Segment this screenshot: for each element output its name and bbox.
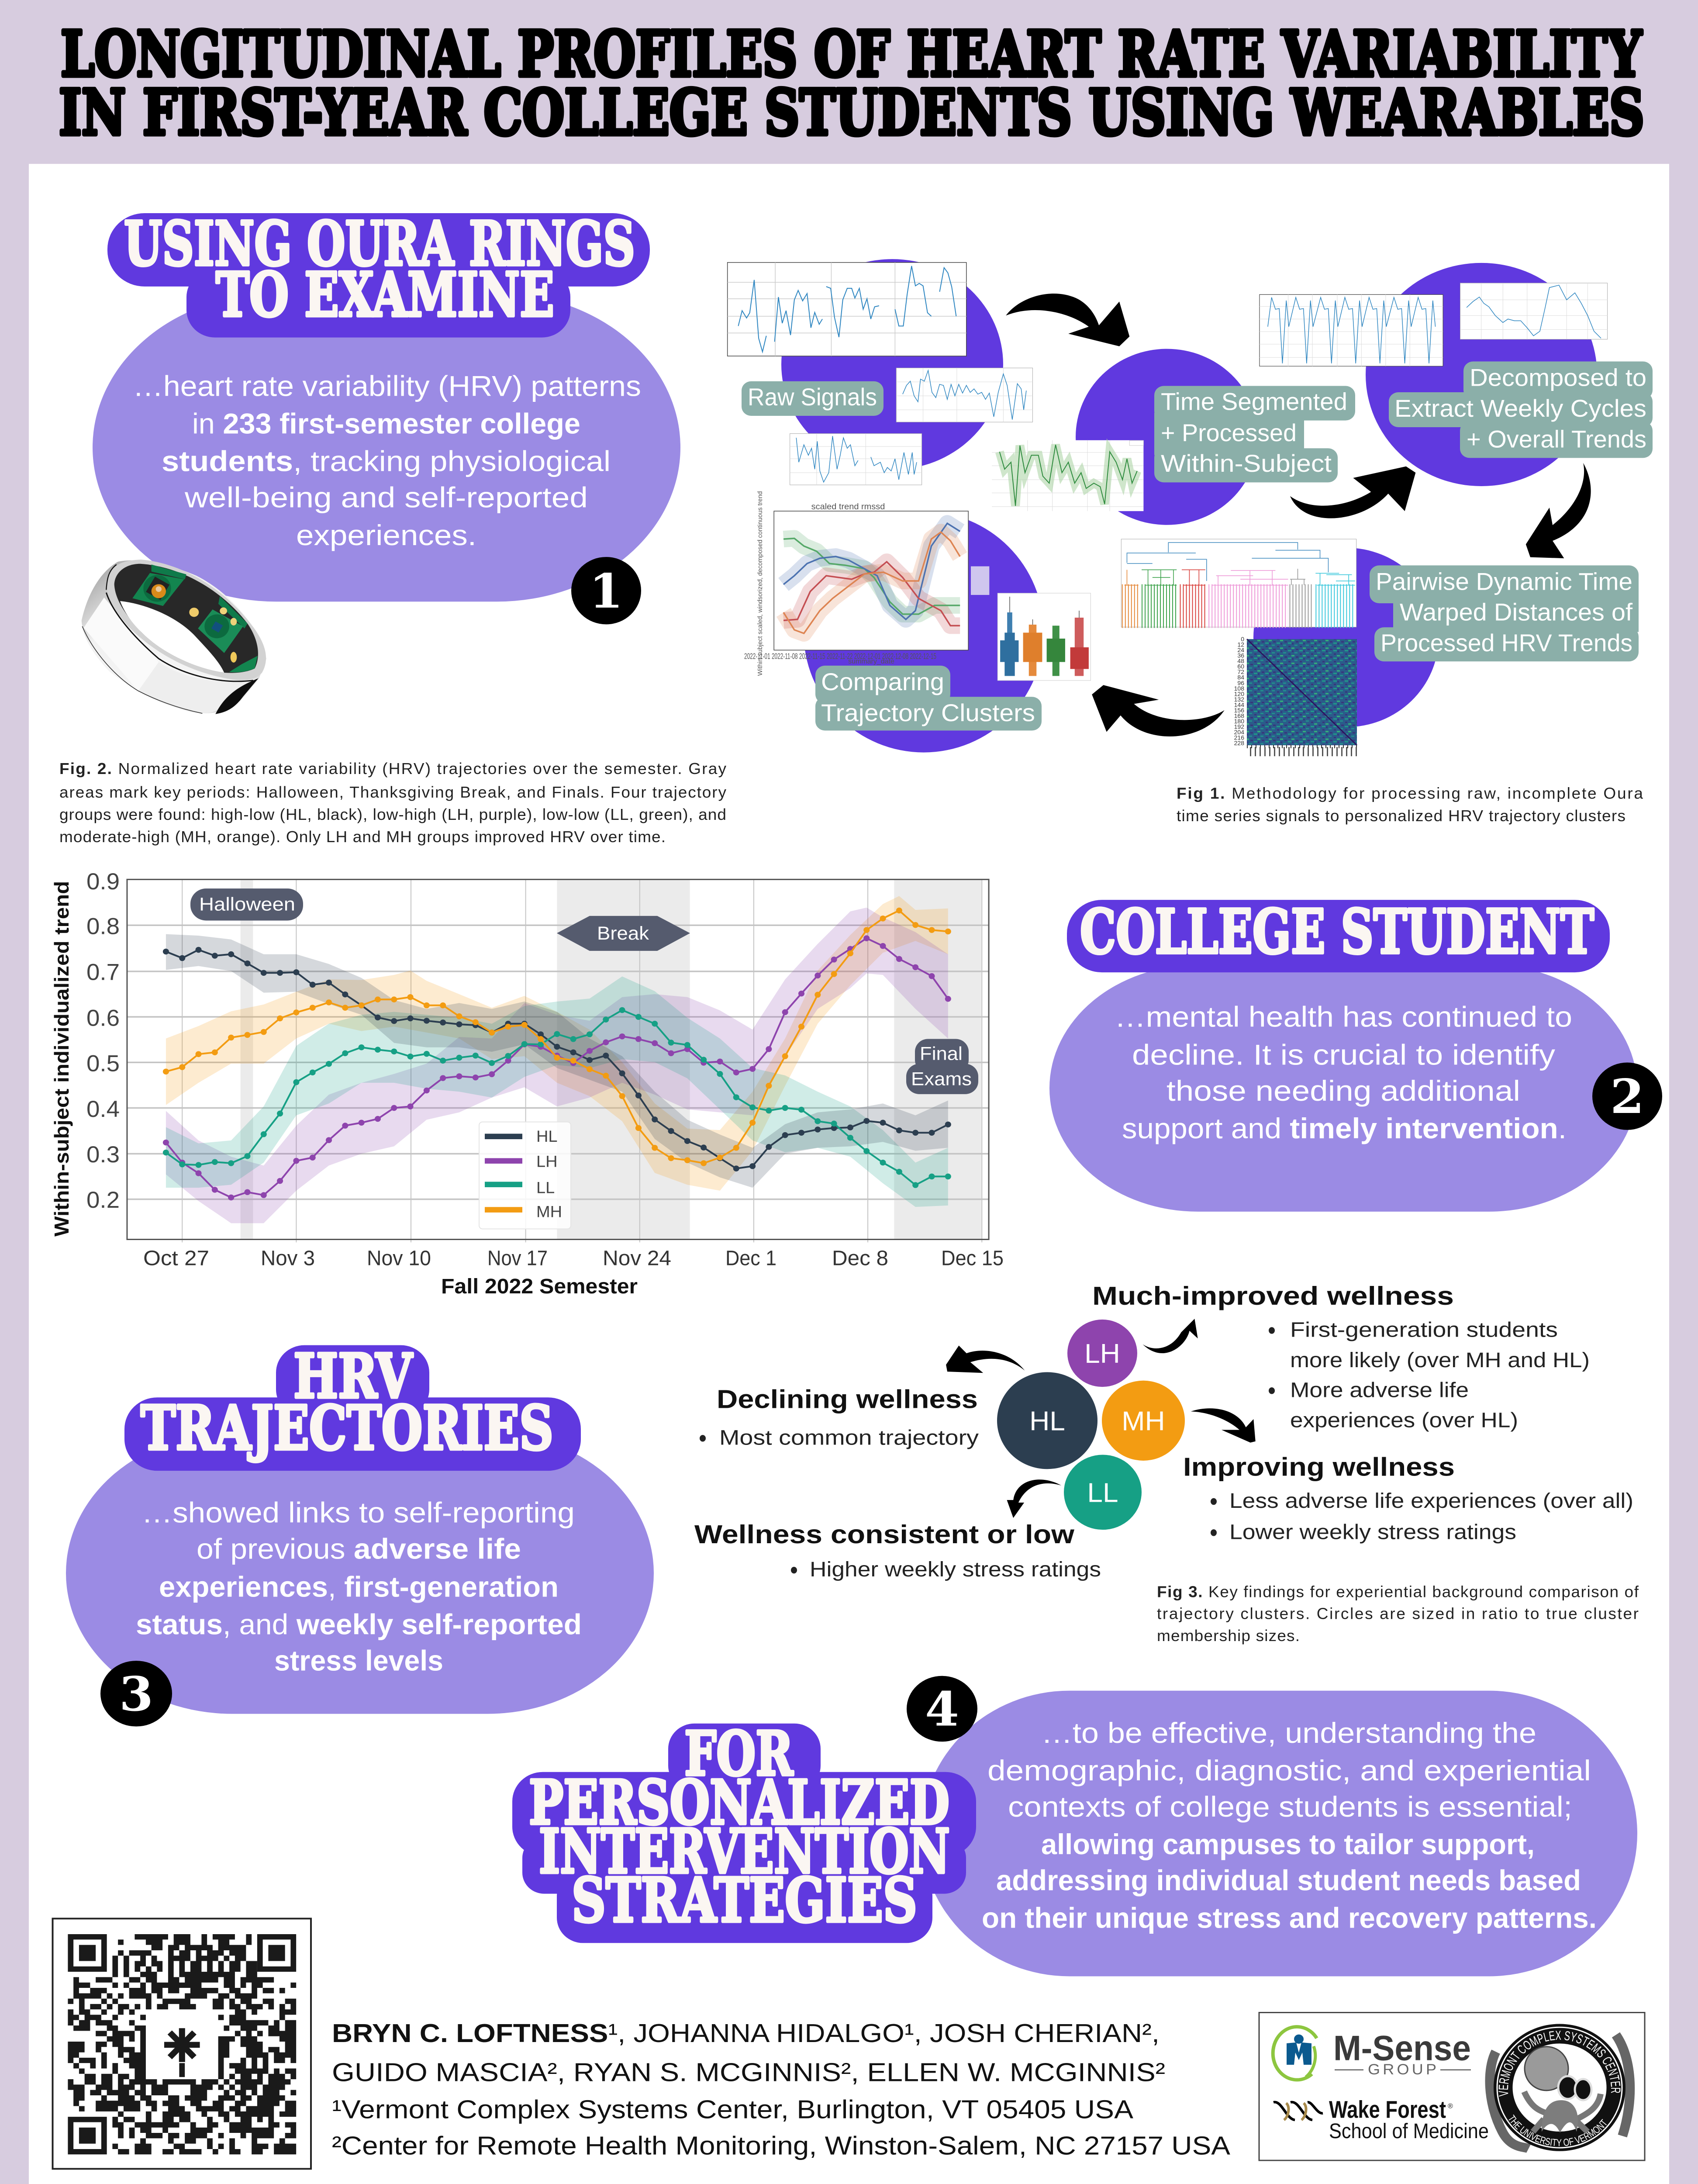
icon: number badge 3: 3	[119, 1666, 153, 1721]
x axis tick labels: Dec 15	[941, 1247, 1004, 1270]
x axis tick labels: Dec 1	[725, 1247, 777, 1270]
chart: distance heatmap: 60	[1237, 663, 1244, 670]
icon: number badge 3	[100, 1661, 172, 1727]
caption: figure 2: Fig. 2. Normalized heart rate variability (HRV) trajectories over the semester. Gray	[59, 760, 727, 778]
caption: figure 2: areas mark key periods: Halloween, Thanksgiving Break, and Finals. Four trajectory	[59, 783, 727, 801]
text block: section 3 body: of previous adverse life	[197, 1534, 521, 1565]
chart: distance heatmap: 84	[1237, 674, 1244, 681]
panel: section 3 HRV trajectories	[66, 1341, 654, 1714]
QR code	[52, 1918, 311, 2169]
chart legend: MH	[536, 1203, 562, 1220]
text block: authors and affiliations: ²Center for Remote Health Monitoring, Winston-Salem, NC 27157 USA	[332, 2131, 1230, 2160]
text block: section 1 body: experiences.	[296, 520, 476, 552]
finding: declining wellness: Most common trajectory	[719, 1426, 979, 1449]
cluster circles	[997, 1320, 1185, 1530]
chart: distance heatmap: 156	[1234, 707, 1244, 714]
finding: much-improved wellness: more likely (over MH and HL)	[1290, 1349, 1590, 1372]
chart: distance heatmap: 72	[1237, 669, 1244, 675]
text block: section 2 body: …mental health has continued to	[1115, 1002, 1572, 1033]
finding: wellness consistent or low	[694, 1520, 1101, 1581]
cluster circles: HL	[1029, 1406, 1065, 1436]
caption: figure 3: membership sizes.	[1157, 1627, 1300, 1645]
label: time segmented: + Processed	[1161, 419, 1297, 447]
chart legend: LH	[536, 1152, 558, 1171]
cluster circles: LH	[1084, 1339, 1120, 1369]
chart: distance heatmap: 120	[1234, 691, 1244, 697]
finding: improving wellness: Less adverse life experiences (over all)	[1229, 1489, 1633, 1513]
text block: section 3 body: experiences, first-generation	[159, 1572, 559, 1603]
finding: declining wellness	[700, 1384, 979, 1449]
chart legend	[479, 1122, 571, 1229]
y axis tick labels: 0.9	[86, 869, 120, 895]
label: time segmented: Time Segmented	[1161, 388, 1347, 415]
finding: much-improved wellness: First-generation students	[1290, 1318, 1558, 1341]
heading: using Oura rings	[107, 208, 650, 338]
text block: section 1 body	[133, 371, 641, 552]
plot area	[127, 879, 989, 1242]
text block: section 4 body	[982, 1717, 1597, 1934]
logo: Wake Forest School of Medicine: ®	[1448, 2103, 1453, 2110]
callout: final exams: Final	[920, 1044, 963, 1064]
y axis tick labels: 0.6	[86, 1005, 120, 1031]
label: raw signals: Raw Signals	[748, 384, 877, 411]
label: decomposed: Extract Weekly Cycles	[1394, 395, 1646, 422]
chart labels: cluster trajectories: summary_date	[848, 658, 894, 665]
text block: section 4 body: allowing campuses to tailor support,	[1041, 1829, 1535, 1861]
chart: HRV trajectories over semester	[50, 869, 1004, 1298]
text block: section 4 body: on their unique stress and recovery patterns.	[982, 1903, 1597, 1934]
text block: section 3 body: stress levels	[274, 1645, 443, 1677]
icon: number badge 1	[571, 557, 641, 624]
chart labels: cluster trajectories: scaled trend rmssd	[811, 502, 885, 511]
label: decomposed: Decomposed to	[1470, 364, 1646, 391]
x axis title: Fall 2022 Semester	[441, 1275, 638, 1298]
text block: authors and affiliations	[332, 2018, 1230, 2160]
arrow: decomposed to pairwise	[1526, 463, 1591, 558]
callout: Halloween	[190, 888, 303, 920]
chart: distance heatmap: 180	[1234, 718, 1244, 725]
finding: declining wellness: Declining wellness	[717, 1384, 978, 1413]
chart legend: HL	[536, 1127, 558, 1145]
caption: figure 1: time series signals to personalized HRV trajectory clusters	[1177, 807, 1626, 825]
chart: raw signal 3	[790, 434, 922, 485]
y axis tick labels	[86, 869, 120, 1213]
chart: boxen plot	[997, 593, 1091, 681]
finding: much-improved wellness: More adverse life	[1290, 1379, 1469, 1402]
panel: methodology workflow	[728, 259, 1653, 753]
arrow: raw to processed	[1006, 294, 1129, 346]
logo: Vermont Complex Systems Center seal: VERMONT COMPLEX SYSTEMS CENTER	[1496, 2028, 1623, 2097]
y axis tick labels: 0.4	[86, 1096, 120, 1122]
panel: section 2 college student	[1049, 896, 1637, 1212]
chart labels: cluster trajectories	[744, 491, 936, 676]
cluster circles: MH	[1122, 1406, 1165, 1436]
y axis tick labels: 0.2	[86, 1187, 120, 1213]
label: time segmented: Within-Subject	[1161, 450, 1332, 477]
icon: Oura ring	[82, 560, 266, 714]
label: pairwise: Processed HRV Trends	[1380, 629, 1632, 657]
label: comparing: Trajectory Clusters	[821, 699, 1035, 727]
x axis tick labels: Nov 17	[487, 1247, 548, 1270]
chart: distance heatmap: 204	[1234, 729, 1244, 736]
chart: distance heatmap: 144	[1234, 702, 1244, 708]
label: pairwise: Warped Distances of	[1400, 599, 1632, 626]
chart: distance heatmap	[1234, 636, 1357, 752]
panel: institutional logos	[1259, 2012, 1645, 2160]
finding: wellness consistent or low: Wellness consistent or low	[694, 1520, 1075, 1549]
chart: raw signal 2	[896, 368, 1033, 422]
chart: processed within-subject signal	[992, 440, 1143, 511]
text block: section 4 body: contexts of college students is essential;	[1008, 1791, 1572, 1823]
panel: section 4 personalized intervention	[512, 1691, 1637, 1976]
text block: section 2 body: those needing additional	[1167, 1075, 1520, 1107]
icon: number badge 1: 1	[589, 563, 623, 619]
workflow blobs	[781, 259, 1597, 753]
chart labels: cluster trajectories: Within-subject scaled, windsorized, decomposed continuous trend	[757, 491, 764, 676]
chart: weekly cycles decomposition	[1260, 294, 1443, 366]
logo: Wake Forest School of Medicine: Wake Forest	[1329, 2096, 1446, 2123]
chart: distance heatmap: 216	[1234, 735, 1244, 741]
y axis tick labels: 0.5	[86, 1051, 120, 1077]
y axis title: Within-subject individualized trend	[50, 881, 73, 1237]
cluster circles: LL	[1087, 1478, 1118, 1508]
title	[59, 17, 1644, 149]
chart: distance heatmap: 12	[1237, 642, 1244, 648]
finding: much-improved wellness: Much-improved wellness	[1092, 1281, 1454, 1310]
logo: Vermont Complex Systems Center seal	[1490, 2024, 1630, 2151]
icon: number badge 2	[1592, 1062, 1662, 1130]
heading: HRV trajectories: HRV	[293, 1341, 413, 1412]
finding: improving wellness	[1183, 1452, 1633, 1544]
heading: using Oura rings: TO EXAMINE	[216, 259, 554, 331]
logo: Wake Forest School of Medicine	[1274, 2096, 1489, 2143]
heading: HRV trajectories: TRAJECTORIES	[141, 1393, 553, 1464]
text block: authors and affiliations: BRYN C. LOFTNESS ¹, JOHANNA HIDALGO¹, JOSH CHERIAN²,	[332, 2018, 1160, 2048]
caption: figure 1: Fig 1. Methodology for processing raw, incomplete Oura	[1177, 784, 1643, 802]
text block: authors and affiliations: ¹Vermont Complex Systems Center, Burlington, VT 05405 USA	[332, 2095, 1133, 2124]
text block: section 4 body: addressing individual student needs based	[996, 1865, 1581, 1897]
caption: figure 3: trajectory clusters. Circles are sized in ratio to true cluster	[1157, 1605, 1639, 1622]
chart: distance heatmap: 0	[1241, 636, 1244, 643]
y axis tick labels: 0.8	[86, 913, 120, 939]
x axis tick labels: Nov 10	[367, 1247, 431, 1270]
text block: section 2 body: decline. It is crucial to identify	[1132, 1039, 1556, 1071]
arrow: processed to decomposed	[1290, 467, 1415, 518]
finding: wellness consistent or low: Higher weekly stress ratings	[810, 1558, 1101, 1581]
heading: for personalized intervention strategies: PERSONALIZED	[529, 1767, 949, 1838]
caption: figure 3: Fig 3. Key findings for experiential background comparison of	[1157, 1583, 1639, 1600]
caption: figure 2: groups were found: high-low (HL, black), low-high (LH, purple), low-low (LL, green), and	[59, 806, 726, 823]
label: pairwise: Pairwise Dynamic Time	[1376, 568, 1632, 595]
text block: section 2 body	[1115, 1002, 1572, 1145]
chart: cluster trajectories	[774, 511, 989, 650]
label: decomposed	[1389, 362, 1653, 458]
label: comparing: Comparing	[821, 668, 944, 696]
label: pairwise	[1370, 565, 1639, 661]
chart: distance heatmap: 108	[1234, 685, 1244, 692]
icon: number badge 4: 4	[925, 1681, 959, 1737]
text block: section 1 body: …heart rate variability (HRV) patterns	[133, 371, 641, 402]
finding: much-improved wellness: experiences (over HL)	[1290, 1409, 1518, 1432]
label: time segmented	[1154, 386, 1355, 482]
finding: improving wellness: Lower weekly stress ratings	[1229, 1521, 1516, 1544]
y axis tick labels: 0.3	[86, 1142, 120, 1168]
chart: distance heatmap: 36	[1237, 653, 1244, 659]
chart: distance heatmap: 48	[1237, 658, 1244, 664]
chart: distance heatmap: 24	[1237, 647, 1244, 653]
icon: number badge 2: 2	[1610, 1069, 1644, 1124]
arrows: cluster outcomes	[946, 1319, 1256, 1518]
x axis tick labels: Dec 8	[832, 1247, 888, 1270]
text block: section 2 body: support and timely intervention.	[1122, 1113, 1567, 1145]
chart: distance heatmap: 132	[1234, 696, 1244, 703]
x axis tick labels: Nov 3	[261, 1247, 315, 1270]
callout: break: Break	[597, 923, 649, 944]
text block: section 3 body: …showed links to self-reporting	[142, 1497, 575, 1529]
logo: M-Sense group	[1273, 2027, 1471, 2080]
heading: HRV trajectories	[124, 1341, 581, 1471]
chart: raw signal 1	[728, 263, 966, 356]
text block: section 3 body: status, and weekly self-reported	[136, 1609, 582, 1641]
text block: section 3 body	[136, 1497, 582, 1677]
text block: section 1 body: in 233 first-semester college	[192, 408, 580, 440]
chart: distance heatmap: 228	[1234, 740, 1244, 746]
chart: distance heatmap: 96	[1237, 680, 1244, 686]
callout: break	[557, 916, 690, 951]
caption: figure 2	[59, 760, 727, 846]
callout: final exams: Exams	[911, 1069, 972, 1089]
icon: number badge 4	[907, 1676, 977, 1742]
heading: for personalized intervention strategies: FOR	[684, 1718, 794, 1790]
panel: key findings figure 3	[694, 1281, 1633, 1581]
callout: final exams	[906, 1039, 978, 1094]
text block: section 4 body: …to be effective, understanding the	[1041, 1717, 1536, 1749]
heading: for personalized intervention strategies: STRATEGIES	[572, 1865, 917, 1936]
x axis tick labels: Oct 27	[143, 1247, 209, 1270]
chart: distance heatmap: 168	[1234, 713, 1244, 719]
chart legend: LL	[536, 1178, 555, 1196]
text block: section 1 body: students , tracking physiological	[162, 446, 611, 477]
logo: M-Sense group: M-Sense	[1333, 2028, 1471, 2068]
panel: section 1 Oura rings	[93, 208, 680, 601]
label: comparing	[815, 666, 1042, 730]
heading: for personalized intervention strategies	[512, 1718, 976, 1943]
x axis tick labels: Nov 24	[603, 1247, 671, 1270]
chart: dendrogram	[1121, 539, 1356, 627]
text block: section 1 body: well-being and self-reported	[184, 482, 588, 514]
chart labels: cluster trajectories: 2022-11-01 2022-11-08 2022-11-15 2022-11-22 2022-12-01 2022-12-08 2022-12-15	[744, 652, 936, 660]
finding: much-improved wellness	[1092, 1281, 1590, 1432]
finding: improving wellness: Improving wellness	[1183, 1452, 1455, 1481]
label: decomposed: + Overall Trends	[1467, 425, 1646, 453]
x axis tick labels	[143, 1247, 1004, 1270]
caption: figure 2: moderate-high (MH, orange). Only LH and MH groups improved HRV over time.	[59, 828, 666, 846]
text block: section 4 body: demographic, diagnostic, and experiential	[987, 1755, 1591, 1787]
arrow: pairwise to comparing	[1092, 685, 1225, 736]
text block: authors and affiliations: GUIDO MASCIA², RYAN S. MCGINNIS², ELLEN W. MCGINNIS²	[332, 2058, 1165, 2087]
logo: M-Sense group: GROUP	[1368, 2061, 1436, 2078]
caption: figure 1	[1177, 784, 1643, 825]
chart: overall trend decomposition	[1460, 283, 1608, 339]
logo: Wake Forest School of Medicine: School of Medicine	[1329, 2120, 1489, 2143]
callout: Halloween: Halloween	[199, 894, 295, 915]
y axis tick labels: 0.7	[86, 959, 120, 985]
heading: for personalized intervention strategies: INTERVENTION	[539, 1816, 950, 1887]
caption: figure 3	[1157, 1583, 1639, 1645]
chart: distance heatmap: 192	[1234, 724, 1244, 730]
heading: using Oura rings: USING OURA RINGS	[124, 208, 635, 280]
logo: Vermont Complex Systems Center seal: THE UNIVERSITY OF VERMONT	[1506, 2113, 1610, 2148]
